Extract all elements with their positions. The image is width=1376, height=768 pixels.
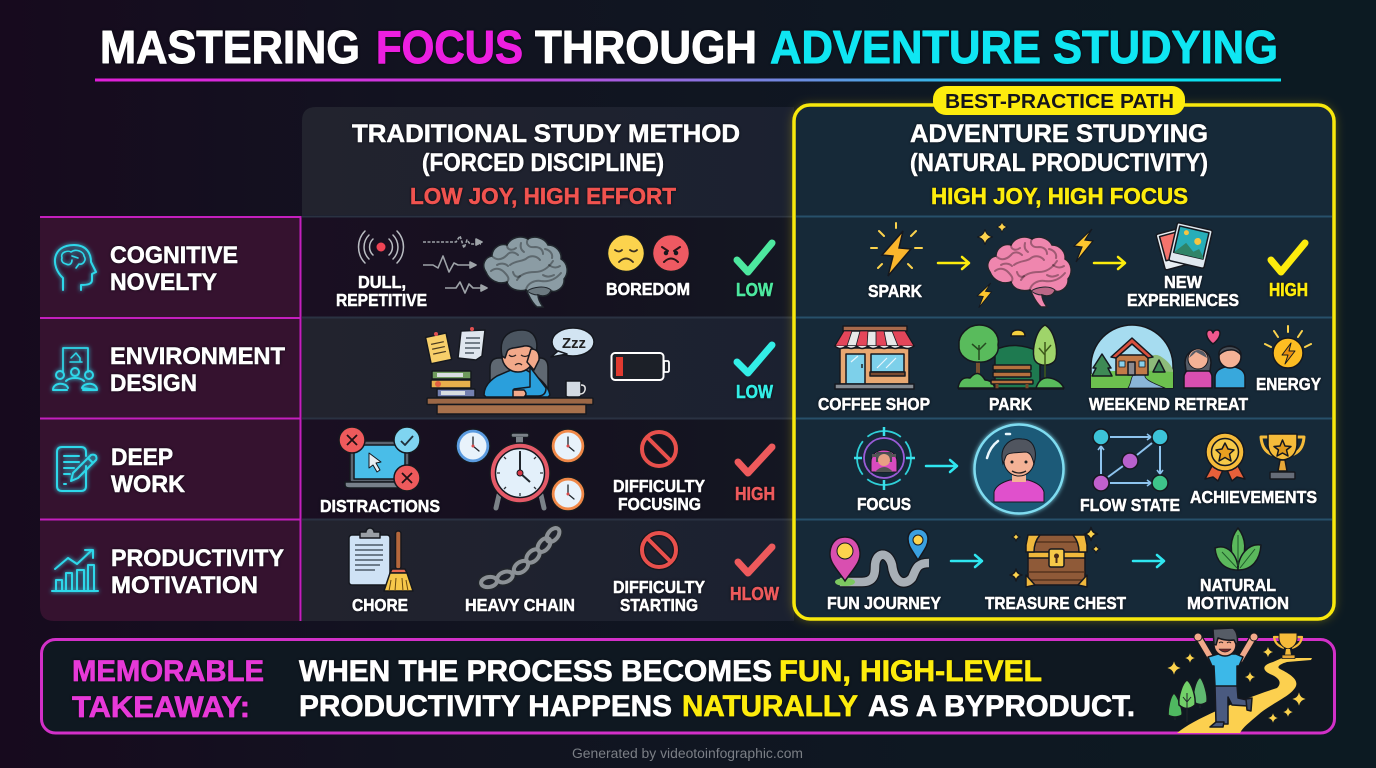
column heading: traditional xyxy=(352,120,740,209)
column heading: adventure xyxy=(910,120,1208,209)
row 4: productivity motivation, adventure: MOTIVATION xyxy=(1187,593,1289,613)
icon: energy bulb xyxy=(1265,326,1311,368)
takeaway text: PRODUCTIVITY HAPPENS xyxy=(299,690,672,723)
row label: environment design xyxy=(53,343,285,397)
row 2: environment design, adventure xyxy=(818,325,1321,414)
arrow xyxy=(926,460,957,472)
row 3: deep work, adventure: FOCUS xyxy=(857,494,911,514)
column heading: traditional: TRADITIONAL STUDY METHOD xyxy=(352,120,740,148)
row 1: cognitive novelty, traditional: REPETITIVE xyxy=(336,290,427,310)
column heading: traditional: LOW JOY, HIGH EFFORT xyxy=(410,183,677,209)
row label: deep work xyxy=(57,444,185,498)
row 2: environment design, adventure: WEEKEND RETREAT xyxy=(1089,394,1248,414)
row 2: environment design, adventure: ENERGY xyxy=(1256,374,1321,394)
takeaway label xyxy=(72,655,264,724)
title: THROUGH xyxy=(535,21,757,73)
row 1: cognitive novelty, traditional: BOREDOM xyxy=(606,279,690,299)
row 3: deep work, adventure: ACHIEVEMENTS xyxy=(1190,487,1317,507)
row label: environment design: DESIGN xyxy=(110,370,197,397)
icon: coffee shop xyxy=(835,326,914,389)
arrow xyxy=(951,555,982,567)
takeaway label: TAKEAWAY: xyxy=(72,691,250,724)
row 3: deep work, traditional: DISTRACTIONS xyxy=(320,496,440,516)
rating: low xyxy=(736,243,773,300)
illustration: tired student at desk xyxy=(426,327,594,414)
row 1: cognitive novelty, adventure: SPARK xyxy=(868,281,922,301)
row 3: deep work, adventure xyxy=(854,424,1317,515)
illustration: tired student at desk: Zzz xyxy=(562,335,586,352)
icon: park xyxy=(958,325,1064,389)
row 4: productivity motivation, adventure: NATURAL xyxy=(1200,575,1276,595)
row 1: cognitive novelty, traditional: DULL, xyxy=(358,272,406,292)
rating: high: HIGH xyxy=(735,484,775,504)
row label: productivity motivation xyxy=(52,545,284,599)
icon: pink brain with sparks xyxy=(977,222,1093,308)
rating: low: LOW xyxy=(736,382,773,402)
row label: deep work: WORK xyxy=(111,471,185,498)
row 1: cognitive novelty, adventure xyxy=(868,222,1308,310)
trees xyxy=(1168,677,1207,722)
rating: hlow xyxy=(730,547,779,604)
row 4: productivity motivation, traditional: STARTING xyxy=(620,595,698,615)
row label: productivity motivation: PRODUCTIVITY xyxy=(111,545,284,572)
row 3: deep work, adventure: FLOW STATE xyxy=(1080,495,1180,515)
icon: medal and trophy xyxy=(1205,433,1304,481)
title: MASTERING xyxy=(100,21,360,73)
icon: slow signal arrows xyxy=(423,236,487,293)
icon: head with brain xyxy=(55,245,96,290)
arrow xyxy=(938,257,969,269)
icon: laptop with distractions xyxy=(339,427,420,491)
row 4: productivity motivation, traditional xyxy=(349,526,779,615)
takeaway text: AS A BYPRODUCT. xyxy=(868,690,1135,723)
icon: focus target xyxy=(854,427,915,490)
icon: dull signal xyxy=(359,231,403,263)
panel: row labels xyxy=(40,216,300,621)
row 2: environment design, adventure: COFFEE SHOP xyxy=(818,394,930,414)
icon: heavy chain xyxy=(480,526,562,588)
icon: people and screen xyxy=(53,348,97,390)
row label: cognitive novelty xyxy=(55,242,238,296)
row label: cognitive novelty: NOVELTY xyxy=(110,269,217,296)
icon: alarm clocks xyxy=(456,429,585,511)
icon: low battery xyxy=(612,353,669,380)
golden path xyxy=(1177,658,1312,733)
row 4: productivity motivation, traditional: DIFFICULTY xyxy=(613,577,705,597)
takeaway text: NATURALLY xyxy=(682,690,858,723)
icon: leaves xyxy=(1215,528,1261,570)
arrow xyxy=(1133,555,1164,567)
title: FOCUS xyxy=(376,21,523,73)
icon: prohibited xyxy=(642,533,676,567)
row 4: productivity motivation, traditional: HEAVY CHAIN xyxy=(465,595,575,615)
panel: traditional study method xyxy=(302,107,794,621)
row 1: cognitive novelty, adventure: EXPERIENCES xyxy=(1127,290,1239,310)
takeaway label: MEMORABLE xyxy=(72,655,264,688)
icon: retreat house xyxy=(1091,325,1245,388)
icon: clipboard and broom xyxy=(349,528,413,591)
row 4: productivity motivation, adventure: FUN JOURNEY xyxy=(827,593,941,613)
panel: adventure studying xyxy=(793,86,1335,620)
column heading: adventure: (NATURAL PRODUCTIVITY) xyxy=(910,149,1208,177)
title xyxy=(100,21,1278,73)
icon: photos xyxy=(1156,222,1213,270)
row 2: environment design, traditional xyxy=(426,327,773,414)
footer credit: Generated by videotoinfographic.com xyxy=(572,746,803,761)
row 1: cognitive novelty, traditional xyxy=(336,231,773,310)
arrow xyxy=(1094,257,1125,269)
row 4: productivity motivation, traditional: CHORE xyxy=(352,595,408,615)
rating: high xyxy=(1269,243,1308,300)
icon: winding road with pins xyxy=(830,529,929,586)
icon: growth chart xyxy=(52,550,98,591)
icon: bored and angry faces xyxy=(608,234,690,272)
icon: prohibited xyxy=(642,432,676,466)
takeaway text xyxy=(299,655,1135,723)
rating: low xyxy=(736,345,773,402)
row label: productivity motivation: MOTIVATION xyxy=(111,572,258,599)
column heading: adventure: ADVENTURE STUDYING xyxy=(910,120,1208,148)
icon: flow state diagram xyxy=(1093,429,1168,491)
panel: memorable takeaway xyxy=(42,628,1334,733)
trophy xyxy=(1274,633,1302,658)
takeaway text: WHEN THE PROCESS BECOMES xyxy=(299,655,772,688)
illustration: runner on golden path xyxy=(1167,628,1312,733)
row 3: deep work, traditional xyxy=(320,427,775,516)
row 3: deep work, traditional: FOCUSING xyxy=(618,494,701,514)
icon: gray brain xyxy=(484,237,567,307)
row 1: cognitive novelty, adventure: NEW xyxy=(1164,272,1202,292)
rating: low: LOW xyxy=(736,280,773,300)
row label: deep work: DEEP xyxy=(111,444,173,471)
row 4: productivity motivation, adventure xyxy=(827,527,1289,613)
icon: person in bubble xyxy=(974,424,1064,514)
rating: high: HIGH xyxy=(1269,280,1308,300)
badge: best-practice path: BEST-PRACTICE PATH xyxy=(945,90,1174,113)
runner xyxy=(1194,628,1258,727)
rating: hlow: HLOW xyxy=(730,584,779,604)
rating: high xyxy=(735,447,775,504)
row 3: deep work, traditional: DIFFICULTY xyxy=(613,476,705,496)
row 4: productivity motivation, adventure: TREASURE CHEST xyxy=(985,593,1126,613)
column heading: adventure: HIGH JOY, HIGH FOCUS xyxy=(931,183,1188,209)
icon: treasure chest xyxy=(1010,527,1100,587)
column heading: traditional: (FORCED DISCIPLINE) xyxy=(422,149,664,177)
takeaway text: FUN, xyxy=(779,655,851,688)
row label: environment design: ENVIRONMENT xyxy=(110,343,285,370)
row 2: environment design, adventure: PARK xyxy=(989,394,1032,414)
takeaway text: HIGH-LEVEL xyxy=(860,655,1042,688)
icon: spark xyxy=(871,223,922,276)
title: ADVENTURE STUDYING xyxy=(770,21,1278,73)
row label: cognitive novelty: COGNITIVE xyxy=(110,242,238,269)
icon: document and pencil xyxy=(57,447,96,491)
title underline xyxy=(95,78,1281,82)
